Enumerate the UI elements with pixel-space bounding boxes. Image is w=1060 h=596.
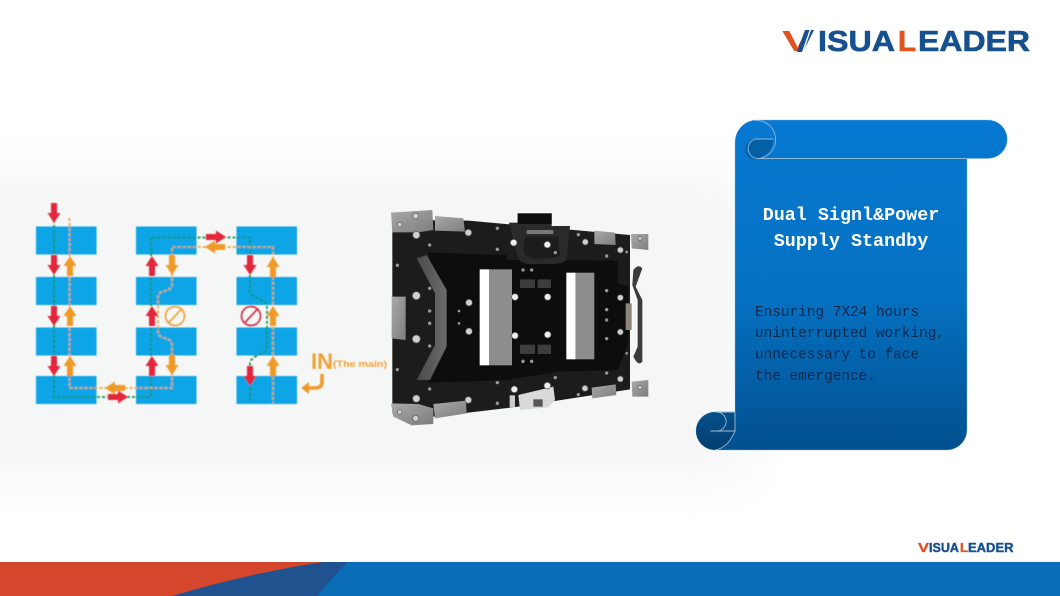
small rivets [396,227,628,405]
logo: top right: ISUA [818,26,895,58]
corner brackets and latches [391,210,648,425]
footer logo [918,540,1014,555]
logo: top right: L [898,26,916,58]
green signal line [54,215,267,403]
panel description [755,305,945,385]
panel description: unnecessary to face [755,348,919,364]
icon: orange prohibited sign [166,306,184,326]
panel title: Supply Standby [774,231,928,252]
top curl [745,120,967,159]
panel description: the emergence. [755,369,876,385]
bottom curl [696,412,735,450]
grey connectors [520,279,551,354]
logo: top right: V [782,26,814,58]
side strip [626,303,632,330]
footer logo: EADER [968,540,1014,555]
product photo: LED cabinet rear [391,210,648,425]
recessed area [428,253,628,383]
label: IN the main [311,349,387,374]
right silver module [566,273,594,359]
flow diagram: dual signal and power [36,203,387,404]
module column 2 [136,226,196,404]
orange arrows [64,240,280,394]
right handle [632,266,642,363]
cabinet body [392,220,630,417]
arrow: input bend [301,374,322,394]
footer logo: L [960,540,968,555]
label: IN the main: IN [311,349,333,374]
panel description: uninterrupted working, [755,326,945,342]
footer logo: V [918,540,929,555]
panel description: Ensuring 7X24 hours [755,305,919,321]
panel title: Dual Signl&Power [763,205,939,226]
footer band [0,562,1060,596]
module column 3 [236,226,297,404]
left curved handle [417,255,447,380]
background glow [0,170,750,480]
panel title [763,205,939,252]
top handle [509,213,570,264]
left silver module [480,269,512,365]
orange power line [70,218,273,403]
red arrows [48,203,256,404]
logo: top right [782,26,1030,58]
scroll body [696,120,1007,450]
module column 1 [36,226,96,404]
footer logo: ISUA [929,540,960,555]
bottom connector [510,387,555,410]
panel: scroll [696,120,1007,450]
screws [397,213,642,421]
label: IN the main: (The main) [333,359,387,370]
icon: red prohibited sign [242,306,260,326]
logo: top right: EADER [918,26,1030,58]
